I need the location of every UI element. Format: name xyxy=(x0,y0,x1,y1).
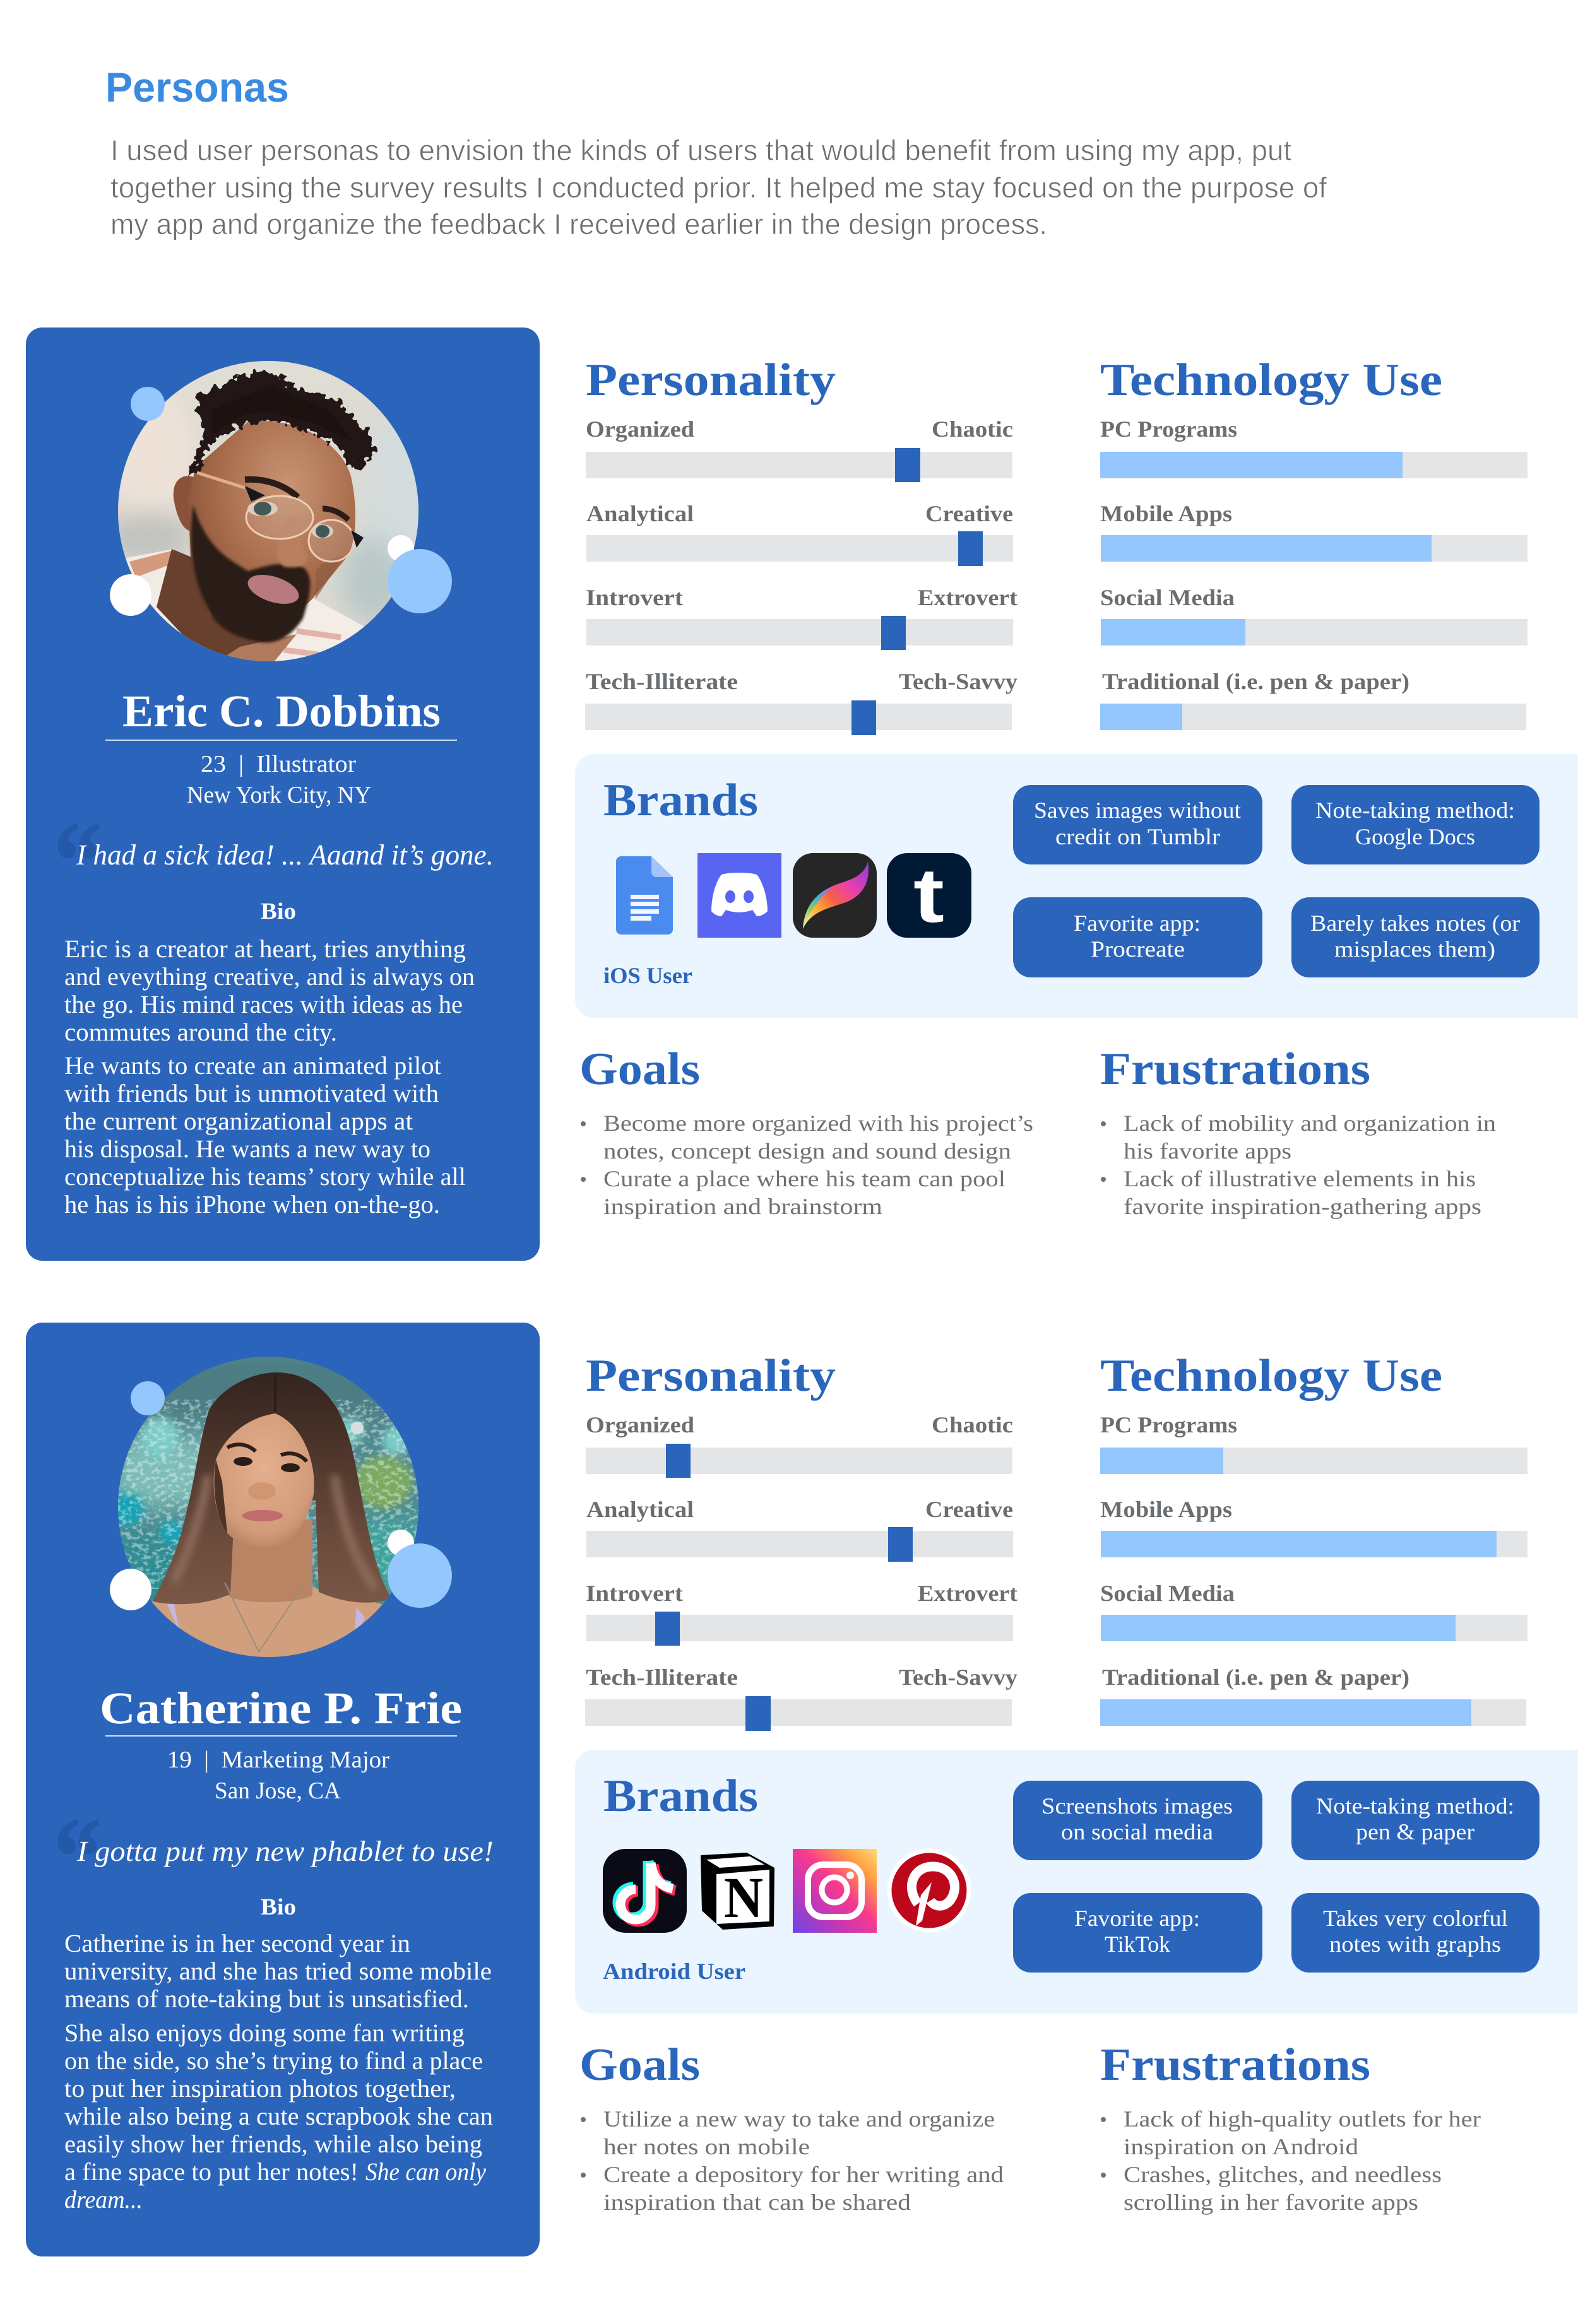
callout: saves images: credit on Tumblr xyxy=(1055,824,1220,849)
bar: traditional xyxy=(1100,1665,1526,1726)
slider: introvert to extrovert xyxy=(586,585,1017,650)
icon: Notion xyxy=(701,1853,774,1930)
callout: barely takes notes: misplaces them) xyxy=(1334,936,1495,962)
list: goals: inspiration that can be shared xyxy=(603,2190,911,2215)
photo: Eric portrait xyxy=(118,361,418,661)
icon: Pinterest xyxy=(887,1849,971,1932)
bio text: a fine space to put her notes! xyxy=(64,2157,359,2186)
bio text: conceptualize his teams’ story while all xyxy=(64,1162,466,1191)
bio text: commutes around the city. xyxy=(64,1018,337,1046)
slider: tech-illiterate to tech-savvy xyxy=(585,1665,1017,1731)
bio text: while also being a cute scrapbook she can xyxy=(64,2102,493,2130)
list: goals: Curate a place where his team can pool xyxy=(603,1166,1006,1191)
panel: Eric profile card xyxy=(26,327,540,1261)
intro text xyxy=(110,134,1327,240)
list: frustrations xyxy=(1101,1111,1496,1219)
panel: Catherine profile card xyxy=(26,1323,540,2256)
slider: organized to chaotic: Chaotic xyxy=(932,1412,1013,1437)
heading: brands: Brands xyxy=(603,774,758,825)
callout: barely takes notes: Barely takes notes (or xyxy=(1310,911,1520,936)
platform label: Android User xyxy=(603,1959,745,1984)
callout: barely takes notes xyxy=(1291,897,1539,977)
list: goals: notes, concept design and sound design xyxy=(603,1138,1011,1164)
bar: mobile apps: Mobile Apps xyxy=(1100,1497,1232,1522)
slider: analytical to creative: Creative xyxy=(925,501,1013,526)
callout: colorful notes xyxy=(1291,1893,1539,1973)
bio text: Eric is a creator at heart, tries anything xyxy=(64,935,466,963)
intro text: my app and organize the feedback I received earlier in the design process. xyxy=(110,208,1047,240)
quote mark: “ xyxy=(54,798,102,923)
callout: screenshots images xyxy=(1013,1781,1262,1860)
bar: traditional: Traditional (i.e. pen & paper) xyxy=(1102,1665,1409,1690)
heading: goals: Goals xyxy=(579,2039,700,2090)
age and occupation: 23 | Illustrator xyxy=(201,751,356,777)
bio text: dream... xyxy=(64,2185,143,2214)
bio text: means of note-taking but is unsatisfied. xyxy=(64,1985,469,2013)
heading: technology use: Technology Use xyxy=(1100,1350,1442,1401)
callout: screenshots images: Screenshots images xyxy=(1041,1793,1233,1819)
bio text: She can only xyxy=(365,2157,486,2186)
callout: favorite app: Favorite app: xyxy=(1074,1906,1200,1931)
list: frustrations: favorite inspiration-gathering apps xyxy=(1124,1194,1481,1219)
platform label: iOS User xyxy=(603,963,692,988)
bar: social media xyxy=(1100,585,1528,646)
icon: Discord xyxy=(697,853,781,938)
panel: brands xyxy=(575,754,1578,1018)
list: goals: Become more organized with his project’s xyxy=(603,1111,1033,1136)
list: frustrations: Lack of mobility and organization in xyxy=(1124,1111,1496,1136)
bar: traditional xyxy=(1100,669,1526,730)
heading: personality: Personality xyxy=(586,1350,836,1401)
callout: colorful notes: Takes very colorful xyxy=(1323,1906,1508,1931)
list: frustrations: Lack of illustrative elements in his xyxy=(1124,1166,1476,1191)
slider: introvert to extrovert: Extrovert xyxy=(918,1581,1017,1606)
quote: I gotta put my new phablet to use! xyxy=(76,1835,494,1867)
callout: favorite app xyxy=(1013,897,1262,977)
quote mark: “ xyxy=(54,1794,102,1919)
callout: note-taking method: Note-taking method: xyxy=(1315,798,1515,823)
slider: introvert to extrovert: Extrovert xyxy=(918,585,1017,610)
slider: organized to chaotic xyxy=(586,1412,1013,1478)
callout: favorite app: Favorite app: xyxy=(1074,911,1201,936)
name: Eric C. Dobbins xyxy=(122,686,441,736)
bio text: and eveything creative, and is always on xyxy=(64,962,475,991)
bio text: She also enjoys doing some fan writing xyxy=(64,2019,465,2047)
photo: Catherine portrait xyxy=(111,1352,423,1665)
bio text: the go. His mind races with ideas as he xyxy=(64,990,463,1018)
list: goals: inspiration and brainstorm xyxy=(603,1194,882,1219)
bio text: the current organizational apps at xyxy=(64,1107,413,1135)
bio text xyxy=(64,935,475,1218)
bar: social media: Social Media xyxy=(1100,1581,1235,1606)
bio text: he has is his iPhone when on-the-go. xyxy=(64,1190,440,1218)
icon: Instagram xyxy=(793,1849,877,1933)
slider: organized to chaotic: Organized xyxy=(586,1412,694,1437)
list: goals: Create a depository for her writing and xyxy=(603,2162,1004,2187)
location: New York City, NY xyxy=(187,782,371,808)
bio text: to put her inspiration photos together, xyxy=(64,2074,456,2103)
slider: organized to chaotic: Chaotic xyxy=(932,416,1013,442)
slider: analytical to creative: Analytical xyxy=(586,1497,694,1522)
panel: brands xyxy=(575,1750,1578,2014)
heading: goals: Goals xyxy=(579,1043,700,1094)
heading: technology use: Technology Use xyxy=(1100,354,1442,406)
callout: note-taking method: Note-taking method: xyxy=(1316,1793,1514,1819)
slider: introvert to extrovert xyxy=(586,1581,1017,1646)
intro text: together using the survey results I conducted prior. It helped me stay focused on the purpose of xyxy=(110,171,1327,204)
slider: introvert to extrovert: Introvert xyxy=(586,1581,683,1606)
bio text: Catherine is in her second year in xyxy=(64,1929,410,1957)
list: goals xyxy=(581,2106,1004,2215)
slider: tech-illiterate to tech-savvy: Tech-Illiterate xyxy=(586,669,738,694)
bar: mobile apps xyxy=(1100,1497,1528,1557)
bar: mobile apps: Mobile Apps xyxy=(1100,501,1232,526)
name: Catherine P. Frie xyxy=(100,1683,462,1733)
list: frustrations: inspiration on Android xyxy=(1124,2134,1358,2159)
callout: saves images: Saves images without xyxy=(1034,798,1241,823)
list: goals: her notes on mobile xyxy=(603,2134,810,2159)
slider: analytical to creative xyxy=(586,501,1013,566)
decorative bubbles xyxy=(110,387,452,616)
list: goals: Utilize a new way to take and organize xyxy=(603,2106,995,2132)
icon: Tumblr: t xyxy=(913,852,944,938)
age and occupation: 19 | Marketing Major xyxy=(167,1747,389,1773)
list: frustrations: Crashes, glitches, and needless xyxy=(1124,2162,1442,2187)
bio text xyxy=(64,1929,493,2214)
callout: favorite app: Procreate xyxy=(1091,936,1185,962)
icon: Procreate xyxy=(793,853,877,938)
bio text: He wants to create an animated pilot xyxy=(64,1051,441,1080)
bar: PC programs: PC Programs xyxy=(1100,416,1237,442)
heading: brands: Brands xyxy=(603,1770,758,1821)
location: San Jose, CA xyxy=(215,1778,341,1804)
bar: PC programs xyxy=(1100,1412,1528,1474)
bio text: university, and she has tried some mobile xyxy=(64,1957,492,1985)
icon: TikTok xyxy=(603,1849,687,1933)
callout: note-taking method xyxy=(1291,785,1539,864)
bio text: easily show her friends, while also being xyxy=(64,2130,482,2158)
icon: Notion: N xyxy=(724,1865,763,1930)
bar: traditional: Traditional (i.e. pen & paper) xyxy=(1102,669,1409,694)
callout: note-taking method: Google Docs xyxy=(1355,824,1475,849)
icon: Tumblr xyxy=(887,852,971,938)
list: goals xyxy=(581,1111,1033,1219)
list: frustrations: his favorite apps xyxy=(1124,1138,1291,1164)
slider: tech-illiterate to tech-savvy: Tech-Illiterate xyxy=(586,1665,738,1690)
list: frustrations xyxy=(1101,2106,1481,2215)
callout: note-taking method: pen & paper xyxy=(1356,1819,1474,1844)
bio text: with friends but is unmotivated with xyxy=(64,1079,439,1107)
callout: favorite app xyxy=(1013,1893,1262,1973)
bar: PC programs xyxy=(1100,416,1528,478)
slider: introvert to extrovert: Introvert xyxy=(586,585,683,610)
icon: Google Docs xyxy=(616,856,673,935)
persona: Catherine xyxy=(26,1323,1578,2256)
bar: social media xyxy=(1100,1581,1528,1641)
bar: mobile apps xyxy=(1100,501,1528,562)
quote: I had a sick idea! ... Aaand it’s gone. xyxy=(76,839,494,871)
bar: social media: Social Media xyxy=(1100,585,1235,610)
slider: organized to chaotic: Organized xyxy=(586,416,694,442)
list: frustrations: scrolling in her favorite apps xyxy=(1124,2190,1418,2215)
bio heading: Bio xyxy=(261,1894,296,1920)
slider: tech-illiterate to tech-savvy xyxy=(585,669,1017,735)
callout: note-taking method xyxy=(1291,1781,1539,1860)
heading: frustrations: Frustrations xyxy=(1100,2039,1370,2090)
heading: frustrations: Frustrations xyxy=(1100,1043,1370,1094)
title: Personas xyxy=(105,64,289,110)
persona: Eric xyxy=(26,327,1578,1261)
callout: colorful notes: notes with graphs xyxy=(1329,1932,1501,1957)
slider: organized to chaotic xyxy=(586,416,1013,482)
bio text: his disposal. He wants a new way to xyxy=(64,1135,430,1163)
slider: tech-illiterate to tech-savvy: Tech-Savvy xyxy=(899,1665,1017,1690)
callout: favorite app: TikTok xyxy=(1105,1932,1170,1957)
slider: analytical to creative: Creative xyxy=(925,1497,1013,1522)
callout: saves images xyxy=(1013,785,1262,864)
list: frustrations: Lack of high-quality outlets for her xyxy=(1124,2106,1481,2132)
intro text: I used user personas to envision the kinds of users that would benefit from using my app, put xyxy=(110,134,1291,167)
slider: analytical to creative: Analytical xyxy=(586,501,694,526)
bio heading: Bio xyxy=(261,899,296,924)
slider: tech-illiterate to tech-savvy: Tech-Savvy xyxy=(899,669,1017,694)
slider: analytical to creative xyxy=(586,1497,1013,1562)
bio text: on the side, so she’s trying to find a place xyxy=(64,2046,483,2075)
bar: PC programs: PC Programs xyxy=(1100,1412,1237,1437)
heading: personality: Personality xyxy=(586,354,836,405)
callout: screenshots images: on social media xyxy=(1061,1819,1213,1844)
decorative bubbles xyxy=(110,1381,452,1610)
